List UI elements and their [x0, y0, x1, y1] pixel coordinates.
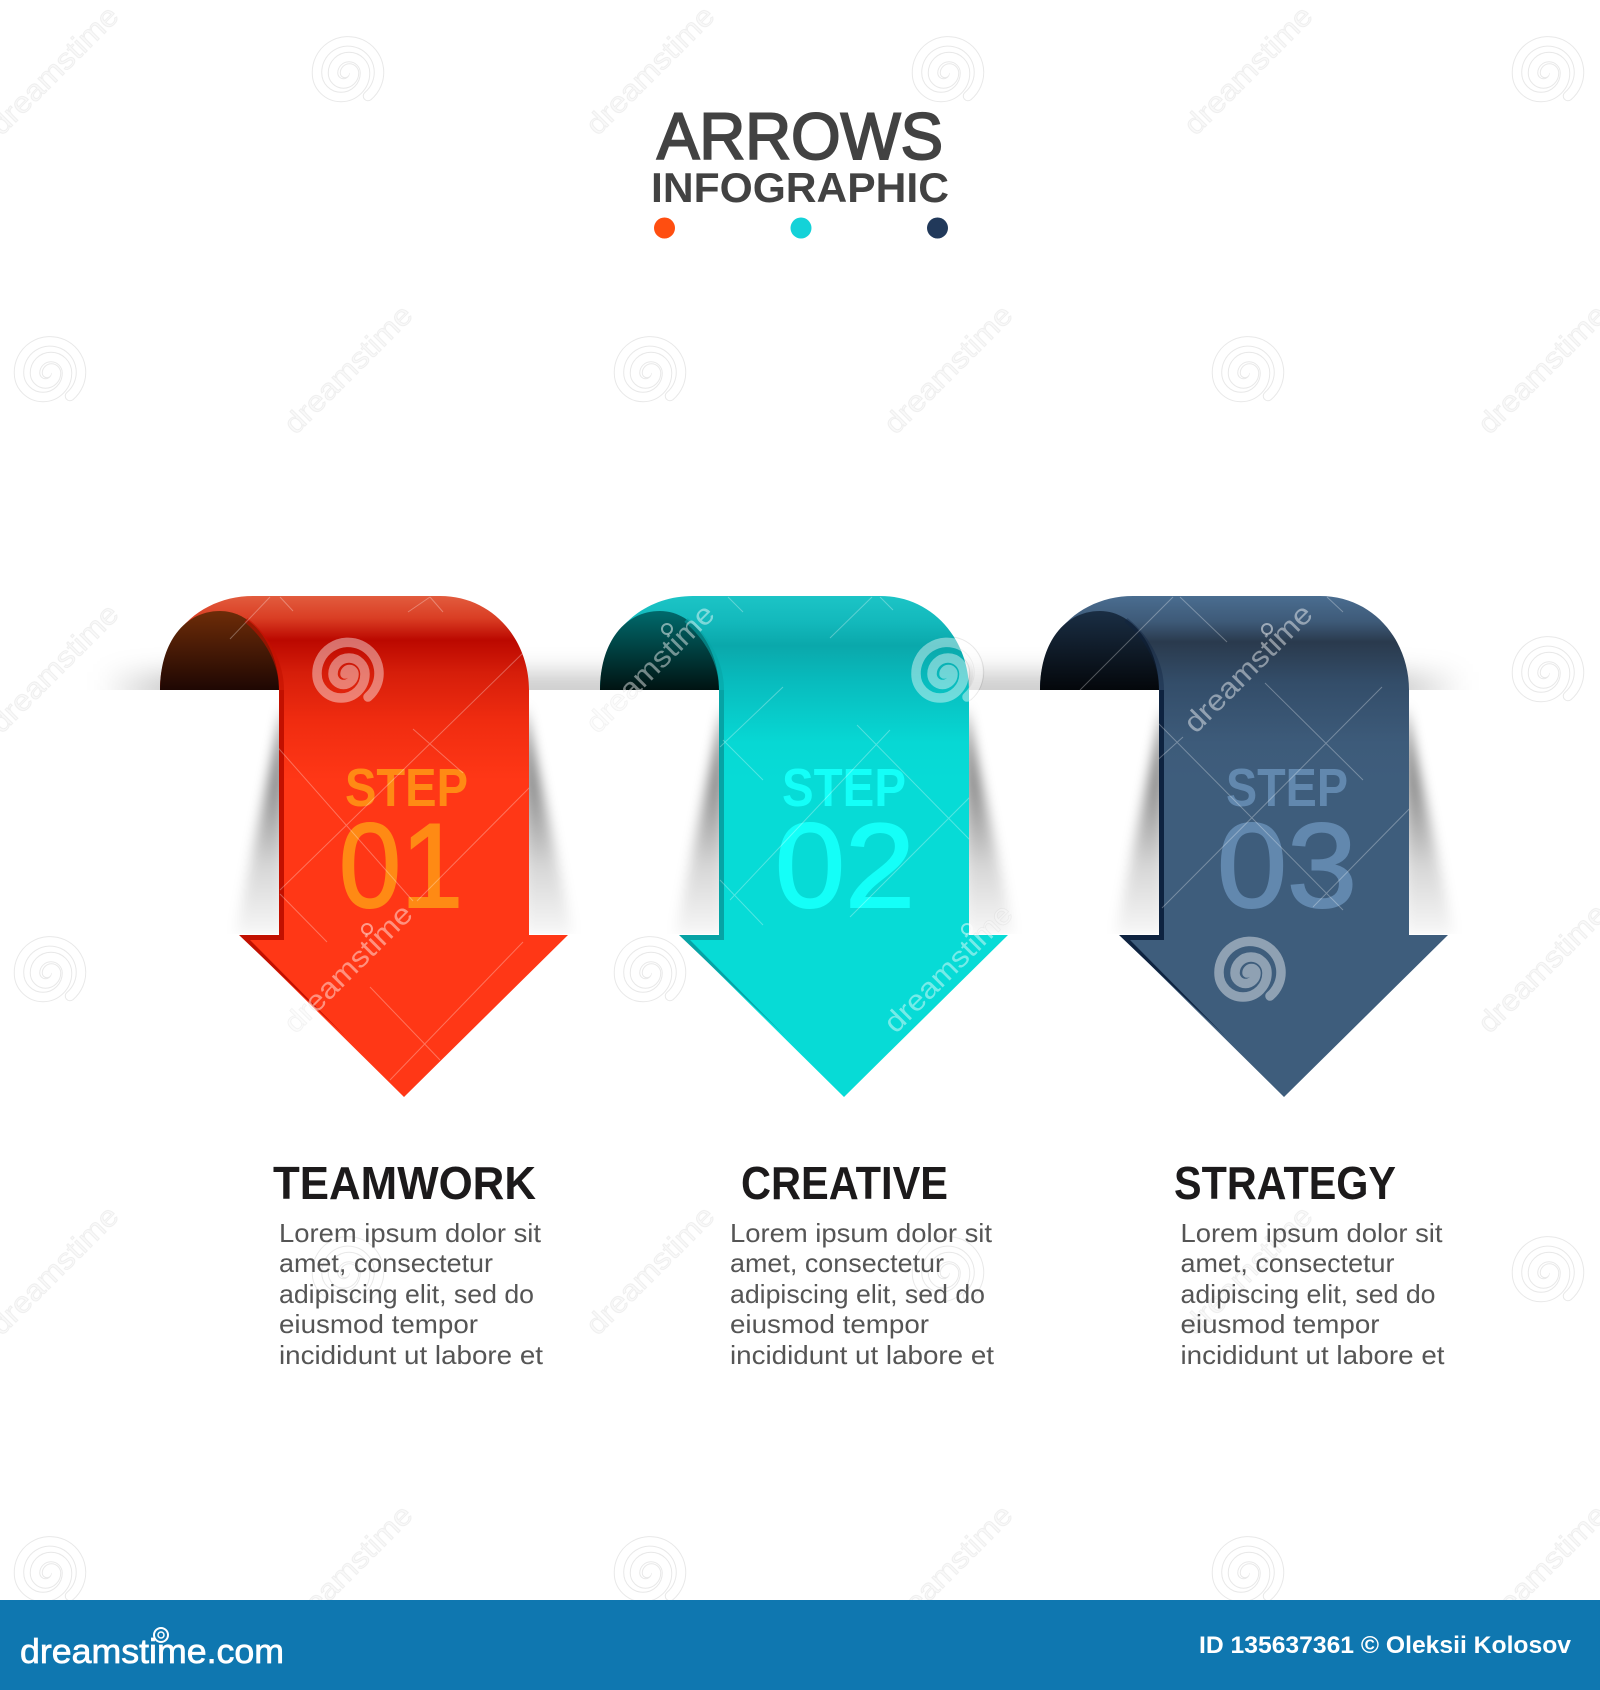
watermark layer: dreamstime — [1472, 898, 1600, 1039]
ribbon watermark text: dreamstime — [580, 598, 721, 739]
body text creative: eiusmod tempor — [730, 1309, 929, 1339]
arrow 3: navy ribbon — [1040, 596, 1448, 1097]
watermark layer: dreamstime — [278, 299, 419, 440]
watermark layer: dreamstime — [1178, 1200, 1319, 1341]
ribbon watermark lines red — [230, 597, 537, 1080]
step 02 label: 02 — [775, 799, 915, 933]
body text strategy: adipiscing elit, sed do — [1180, 1279, 1436, 1309]
body text teamwork: eiusmod tempor — [279, 1309, 478, 1339]
footer credit: ID 135637361 © Oleksii Kolosov — [1199, 1632, 1572, 1659]
watermark layer: dreamstime — [1178, 598, 1319, 739]
fold shadow — [112, 661, 1454, 690]
ribbon edge shading navy — [1119, 620, 1225, 1036]
ribbon watermark text — [278, 598, 1319, 1039]
watermark layer: dreamstime — [580, 0, 721, 141]
ribbon watermark text: dreamstime — [278, 898, 419, 1039]
ribbon watermark text: dreamstime — [878, 898, 1019, 1039]
watermark layer: dreamstime — [278, 898, 419, 1039]
body text strategy: Lorem ipsum dolor sit — [1180, 1218, 1443, 1248]
body text creative: amet, consectetur — [730, 1248, 944, 1278]
step 03 label: STEP — [1226, 758, 1348, 818]
ribbon watermark text: dreamstime — [1178, 598, 1319, 739]
body text creative: incididunt ut labore et — [730, 1340, 995, 1370]
column 3: strategy — [1174, 1157, 1445, 1370]
ribbon inner fold teal — [600, 611, 719, 690]
watermark layer: dreamstime — [878, 299, 1019, 440]
body text strategy — [1180, 1218, 1445, 1370]
ribbon inner fold red — [160, 611, 279, 690]
body text creative: Lorem ipsum dolor sit — [730, 1218, 993, 1248]
ribbon body red — [160, 596, 568, 1097]
watermark layer: dreamstime — [580, 1200, 721, 1341]
watermark layer: dreamstime — [1178, 0, 1319, 141]
watermark layer: dreamstime — [878, 1499, 1019, 1640]
watermark layer: dreamstime — [1472, 1499, 1600, 1640]
ribbon inner fold navy — [1040, 611, 1159, 690]
body text teamwork: incididunt ut labore et — [279, 1340, 544, 1370]
arrow 1: red ribbon — [160, 596, 568, 1097]
footer bar — [0, 1600, 1600, 1690]
footer logo: dreamstime.com — [20, 1633, 284, 1671]
title: ARROWS — [657, 99, 943, 173]
heading strategy: STRATEGY — [1174, 1157, 1396, 1209]
title dots — [654, 218, 948, 238]
step 01 label: STEP — [345, 758, 468, 818]
title: INFOGRAPHIC — [651, 164, 949, 211]
ribbon edge shading red — [239, 620, 345, 1036]
heading teamwork: TEAMWORK — [273, 1157, 536, 1209]
column 1: teamwork — [273, 1157, 544, 1370]
body text strategy: incididunt ut labore et — [1180, 1340, 1445, 1370]
body text teamwork — [279, 1218, 544, 1370]
ribbon watermark lines teal — [720, 597, 970, 925]
body text teamwork: adipiscing elit, sed do — [279, 1279, 534, 1309]
watermark layer: dreamstime — [878, 898, 1019, 1039]
arrow 2: teal ribbon — [600, 596, 1008, 1097]
column 2: creative — [730, 1157, 995, 1370]
body text teamwork: amet, consectetur — [279, 1248, 493, 1278]
body text creative: adipiscing elit, sed do — [730, 1279, 985, 1309]
watermark layer: dreamstime — [1472, 299, 1600, 440]
body text creative — [730, 1218, 995, 1370]
step 01 label: 01 — [339, 799, 463, 933]
ribbon edge shading teal — [679, 620, 785, 1036]
body text strategy: eiusmod tempor — [1180, 1309, 1380, 1339]
ribbon body teal — [600, 596, 1008, 1097]
title — [651, 99, 949, 211]
heading creative: CREATIVE — [741, 1157, 948, 1209]
step 03 label: 03 — [1217, 799, 1357, 933]
step 02 label: STEP — [782, 758, 906, 818]
body text strategy: amet, consectetur — [1180, 1248, 1395, 1278]
ribbon body navy — [1040, 596, 1448, 1097]
ribbon watermark spirals — [317, 642, 1281, 997]
arrow side shadows — [235, 705, 1454, 935]
watermark layer: dreamstime — [580, 598, 721, 739]
body text teamwork: Lorem ipsum dolor sit — [279, 1218, 542, 1248]
watermark layer: dreamstime — [278, 1499, 419, 1640]
ribbon watermark lines navy — [1080, 597, 1418, 910]
